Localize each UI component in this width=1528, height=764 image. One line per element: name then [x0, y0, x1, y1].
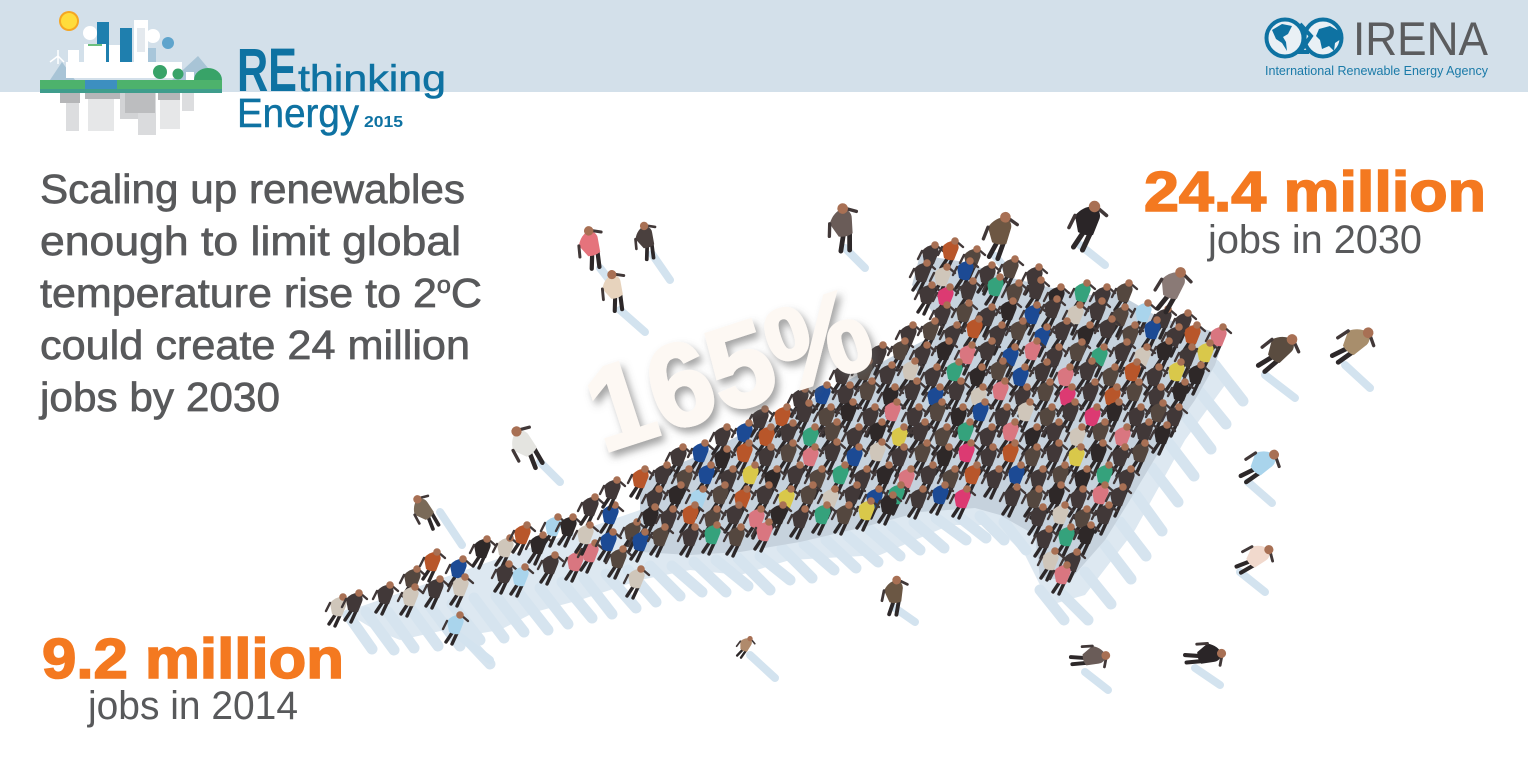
headline text: C [451, 270, 482, 316]
headline text: temperature rise to 2 [40, 270, 418, 316]
headline text: Scaling up renewables [40, 166, 465, 212]
icon: infinity globes [1266, 20, 1342, 56]
stat: 9.2 million jobs in 2014: 9.2 million [42, 627, 344, 691]
crowd arrow [326, 237, 1231, 644]
individual walkers with shadows [403, 199, 1381, 690]
land strip [40, 80, 222, 93]
wordmark: thinking [298, 58, 446, 99]
logo: IRENA [1265, 12, 1489, 78]
wordmark: 2015 [364, 114, 403, 131]
headline text [39, 166, 482, 420]
165% callout: 165% [570, 263, 887, 478]
agency name: International Renewable Energy Agency [1265, 64, 1489, 78]
headline text: o [437, 272, 451, 299]
wordmark [237, 36, 446, 136]
wordmark: Energy [237, 90, 359, 136]
walker at arrow tip [1153, 265, 1192, 314]
icon: grey reflection [60, 93, 194, 135]
stat: 24.4 million jobs in 2030: jobs in 2030 [1207, 218, 1422, 262]
stat: 24.4 million jobs in 2030 [1144, 160, 1486, 262]
headline text: enough to limit global [40, 218, 461, 264]
crowd figures [628, 237, 1231, 594]
tail figures [326, 476, 673, 644]
icon: city skyline [50, 20, 222, 80]
wordmark: RE [237, 36, 297, 104]
logo: RE thinking Energy city [40, 11, 446, 136]
headline text: could create 24 million [40, 322, 470, 368]
stat: 24.4 million jobs in 2030: 24.4 million [1144, 160, 1486, 224]
stat: 9.2 million jobs in 2014: jobs in 2014 [87, 684, 298, 728]
arrow body base [640, 255, 1225, 580]
stat: 9.2 million jobs in 2014 [42, 627, 344, 728]
headline text: jobs by 2030 [39, 374, 280, 420]
IRENA name: IRENA [1353, 12, 1489, 65]
header band [0, 0, 1528, 92]
crowd shadows [345, 340, 1243, 664]
icon: sun [59, 11, 79, 31]
